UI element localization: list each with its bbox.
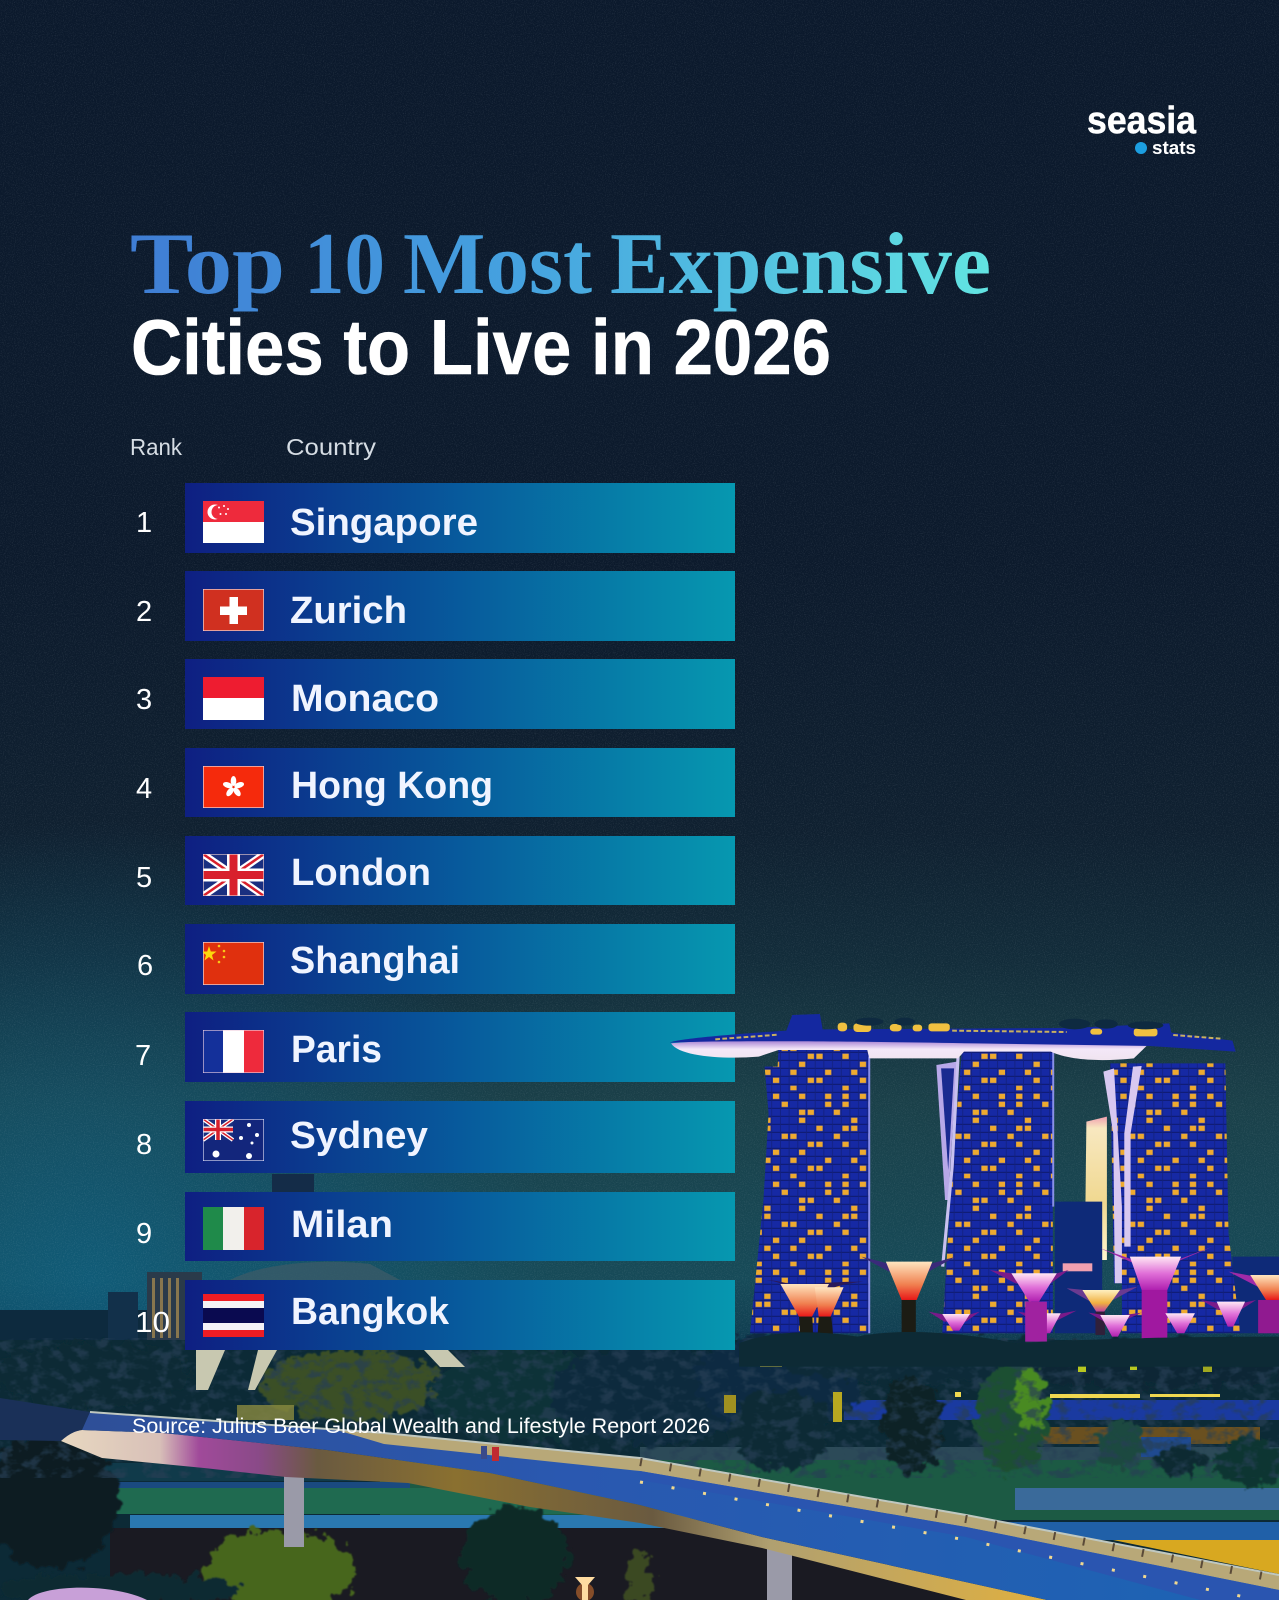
title: Cities to Live in 2026 <box>131 303 831 391</box>
rooftop trees and lights <box>838 1023 1157 1036</box>
distant tall building <box>1085 1117 1107 1260</box>
scattered lights <box>724 1342 1220 1422</box>
title: 10 <box>304 216 385 313</box>
ground and trees <box>0 1330 1279 1600</box>
row 10: Bangkok: Bangkok <box>291 1291 450 1333</box>
row 6: Shanghai: 6 <box>137 950 153 982</box>
title: Top <box>130 216 285 313</box>
row 5: London <box>136 836 735 905</box>
bridge walkway <box>0 1398 1279 1600</box>
row 2: Zurich: Zurich <box>290 590 407 632</box>
supertree group: right side <box>1067 1272 1279 1337</box>
left skyline behind the table <box>0 1174 400 1350</box>
flag: Monaco <box>203 677 264 720</box>
bridge railing <box>330 1428 1279 1590</box>
column headers <box>130 434 377 460</box>
tower 2 <box>936 1050 1053 1333</box>
table of ranked cities <box>130 434 735 1350</box>
bridge deck <box>82 1412 1279 1600</box>
dome bottom left <box>28 1588 147 1600</box>
row 1: Singapore: Singapore <box>290 502 478 544</box>
deck underside <box>671 1040 1148 1060</box>
railing posts <box>640 1462 1279 1579</box>
row 3: Monaco: Monaco <box>291 678 439 720</box>
tower 1 <box>750 1050 869 1333</box>
supertree: large purple <box>1100 1247 1213 1342</box>
row 6: Shanghai <box>137 924 735 994</box>
row 2: Zurich: 2 <box>136 596 152 628</box>
row 4: Hong Kong: 4 <box>136 773 152 805</box>
row 2: Zurich <box>136 571 735 641</box>
deck blue top <box>670 1014 1236 1052</box>
row 7: Paris: 7 <box>135 1040 151 1072</box>
row 5: London: London <box>291 852 431 894</box>
supertree group: magenta <box>928 1270 1077 1342</box>
column headers: Rank <box>130 434 182 460</box>
flag: Italy <box>203 1207 264 1250</box>
title: Expensive <box>610 216 991 313</box>
sky deck <box>670 1014 1236 1060</box>
background: left blue haze <box>0 780 700 1360</box>
railing top edge <box>90 1412 1279 1575</box>
row 8: Sydney <box>136 1101 735 1173</box>
flag: Hong Kong <box>203 766 264 808</box>
tower 3 <box>1103 1063 1240 1333</box>
deck lights <box>640 1482 1279 1600</box>
row 3: Monaco <box>136 659 735 729</box>
title <box>130 216 991 391</box>
row 5: London: 5 <box>136 862 152 894</box>
bridge left approach <box>0 1398 90 1441</box>
flag: Switzerland <box>203 589 264 631</box>
row 1: Singapore: 1 <box>136 507 152 539</box>
logo icon <box>1135 142 1147 154</box>
row 7: Paris: Paris <box>291 1029 382 1071</box>
row 8: Sydney: Sydney <box>290 1115 428 1157</box>
row 10: Bangkok <box>135 1280 735 1350</box>
flag: United Kingdom <box>203 854 264 896</box>
railing blue reflection <box>640 1471 1279 1600</box>
foliage texture <box>0 1338 1279 1478</box>
bridge pillars <box>284 1475 792 1600</box>
row 3: Monaco: 3 <box>136 684 152 716</box>
row 8: Sydney: 8 <box>136 1129 152 1161</box>
building sign <box>1063 1263 1092 1271</box>
flag: Singapore <box>203 501 264 543</box>
row 6: Shanghai: Shanghai <box>290 940 460 982</box>
rooftop dark shrubs <box>855 1018 1163 1029</box>
tower edge highlight <box>869 1050 1053 1333</box>
yellow-lit ground <box>237 1405 294 1420</box>
foliage <box>0 1330 1279 1600</box>
pale structure among the trees <box>196 1350 465 1390</box>
flag: Thailand <box>203 1294 264 1337</box>
supertree: orange centre <box>861 1257 956 1342</box>
row 7: Paris <box>135 1012 735 1082</box>
row 10: Bangkok: 10 <box>135 1307 170 1339</box>
flag: Australia <box>203 1119 264 1161</box>
logo: seasia stats: stats <box>1152 138 1196 158</box>
supertrees <box>767 1247 1279 1363</box>
flag: France <box>203 1030 264 1073</box>
column headers: Country <box>286 434 377 460</box>
lamp <box>575 1577 595 1600</box>
row 4: Hong Kong: Hong Kong <box>291 765 493 807</box>
low blue buildings <box>1055 1202 1279 1333</box>
bridge underside <box>61 1430 1047 1600</box>
logo: seasia stats <box>1087 100 1197 158</box>
Marina Bay Sands towers <box>670 1014 1279 1367</box>
logo: seasia stats: seasia <box>1087 100 1197 142</box>
row 9: Milan: Milan <box>291 1204 393 1246</box>
title: Most <box>403 216 592 313</box>
foreground shrubs <box>739 1332 1279 1367</box>
supertree group: red <box>767 1280 863 1363</box>
flag: China <box>203 942 264 985</box>
row 9: Milan <box>136 1192 735 1261</box>
people on bridge <box>481 1446 499 1461</box>
deck edge lights <box>715 1031 1221 1039</box>
row 1: Singapore <box>136 483 735 553</box>
row 4: Hong Kong <box>136 748 735 817</box>
source note: Source: Julius Baer Global Wealth and Lifestyle Report 2026 <box>132 1415 710 1438</box>
row 9: Milan: 9 <box>136 1218 152 1250</box>
